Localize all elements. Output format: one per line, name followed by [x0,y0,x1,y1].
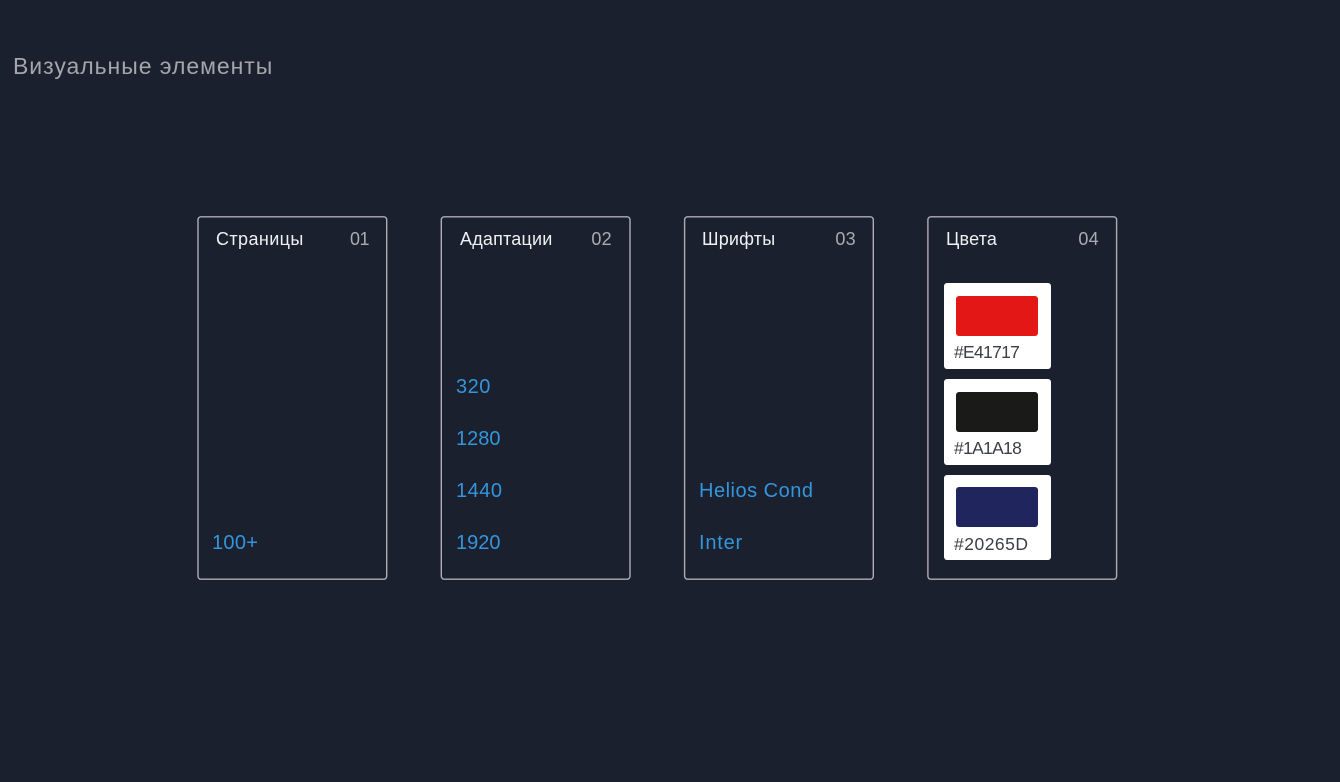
value: 1920: 1920 [456,532,500,554]
code: red: #E41717 [954,342,1019,362]
swatch: black [956,392,1038,432]
number 02: 02 [591,229,612,249]
title: Визуальные элементы [13,53,273,79]
number 04: 04 [1078,229,1099,249]
code: black: #1A1A18 [954,438,1021,458]
value: Inter: Inter [699,532,743,554]
heading: adaptations: Адаптации [460,229,553,249]
panel: adaptations [456,229,612,554]
value: 100+: 100+ [212,532,258,554]
color card: black [944,379,1051,465]
panel: fonts [699,229,856,554]
swatch: red [956,296,1038,336]
heading: pages: Страницы [216,229,304,249]
panel: pages [212,229,369,554]
value: Helios Cond: Helios Cond [699,480,813,502]
heading: colors: Цвета [946,229,997,249]
number 01: 01 [350,229,369,249]
swatch: navy [956,487,1038,527]
value: 1280: 1280 [456,428,500,450]
number 03: 03 [835,229,856,249]
code: navy: #20265D [954,534,1029,554]
value: 320: 320 [456,376,491,398]
color card: red [944,283,1051,369]
panel: colors [944,229,1099,560]
heading: fonts: Шрифты [702,229,775,249]
value: 1440: 1440 [456,480,502,502]
color card: navy [944,475,1051,560]
